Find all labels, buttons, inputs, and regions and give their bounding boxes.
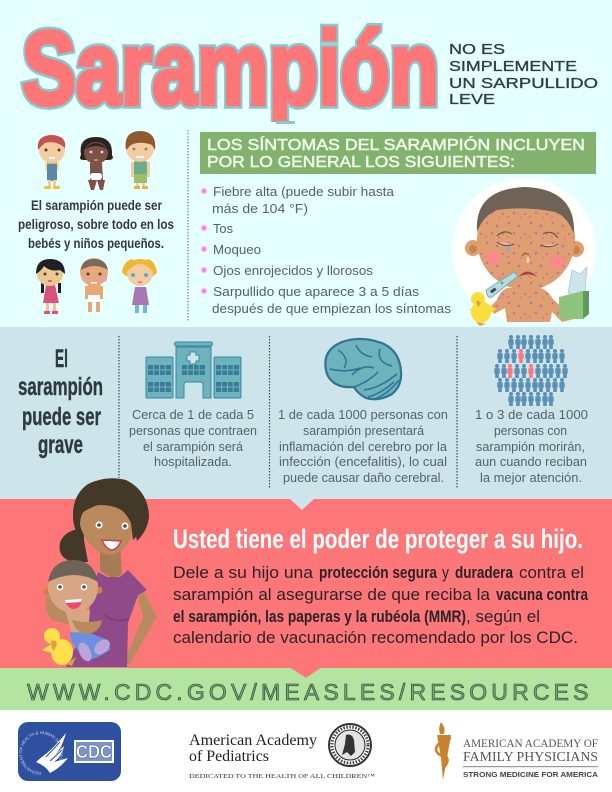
text: vaccine message: , según el — [466, 608, 540, 626]
logo: American Academy of Pediatrics: American Academy — [189, 732, 317, 749]
text: vaccine message — [173, 564, 589, 647]
icon: hospital — [146, 342, 241, 398]
logo: HHS and CDC: DEPARTMENT OF HEALTH & HUMAN SERVICES USA — [19, 731, 63, 775]
url: WWW.CDC.GOV/MEASLES/RESOURCES — [27, 679, 590, 705]
text: encephalitis: puede causar daño cerebral. — [283, 470, 444, 485]
symptoms list: Tos — [213, 221, 233, 236]
symptoms list: Fiebre alta (puede subir hasta — [213, 184, 395, 199]
panel: serious band — [0, 327, 612, 500]
symptoms heading: POR LO GENERAL LOS SIGUIENTES: — [207, 154, 515, 171]
logo: American Academy of Family Physicians: AMERICAN ACADEMY OF — [463, 736, 598, 750]
text: encephalitis: inflamación del cerebro por la — [279, 439, 448, 454]
symptoms list: después de que empiezan los síntomas — [212, 301, 452, 316]
title: Sarampión — [22, 11, 439, 127]
icon: yellow duck — [469, 292, 496, 326]
subtitle — [449, 42, 598, 108]
title: Sarampión — [22, 11, 439, 127]
heading: can be serious: El — [55, 345, 68, 373]
text: encephalitis: 1 de cada 1000 personas con — [278, 407, 448, 422]
icon: duck toy — [42, 628, 76, 666]
symptoms list: Sarpullido que aparece 3 a 5 días — [213, 284, 420, 299]
panel: protect — [0, 499, 612, 668]
heading: can be serious: sarampión — [18, 373, 103, 401]
text: vaccine message: sarampión al asegurarse de que reciba la — [173, 586, 491, 604]
text: deaths: personas con — [494, 423, 567, 438]
text: encephalitis: sarampión presentará — [303, 423, 425, 438]
logo: American Academy of Pediatrics: DEDICATED TO THE HEALTH OF ALL CHILDREN™ — [189, 773, 376, 780]
text: dangerous for children: peligroso, sobre todo en los — [18, 216, 174, 232]
text: vaccine message: contra el — [519, 564, 584, 582]
text: encephalitis — [278, 407, 448, 485]
text: hospitalization: hospitalizada. — [154, 454, 232, 469]
illustration: mother and baby — [42, 478, 157, 667]
text: encephalitis: infección (encefalitis), lo cual — [279, 454, 447, 469]
text: hospitalization: el sarampión será — [143, 439, 244, 454]
subtitle: UN SARPULLIDO — [449, 76, 598, 92]
text: deaths: sarampión morirán, — [476, 439, 585, 454]
icon: thermometer — [486, 272, 518, 297]
symptoms heading: LOS SÍNTOMAS DEL SARAMPIÓN INCLUYEN — [207, 137, 585, 154]
heading: can be serious — [18, 345, 103, 459]
subtitle: SIMPLEMENTE — [449, 59, 577, 75]
text: vaccine message: el sarampión, las paperas y la rubéola (MMR) — [173, 608, 466, 626]
subtitle: NO ES — [449, 42, 505, 58]
heading: can be serious: grave — [38, 431, 83, 459]
logo: American Academy of Family Physicians: STRONG MEDICINE FOR AMERICA — [463, 770, 599, 779]
text: hospitalization — [129, 407, 257, 469]
text: vaccine message: duradera — [455, 564, 514, 582]
symptoms heading — [200, 132, 596, 174]
icon: crowd of people — [494, 335, 568, 406]
logo: HHS and CDC: CDC — [76, 742, 112, 762]
text: dangerous for children: El sarampión puede ser — [31, 197, 162, 213]
icon: tissue box — [559, 267, 589, 319]
logo: HHS and CDC — [18, 722, 121, 781]
text: deaths: 1 o 3 de cada 1000 — [475, 407, 588, 422]
text: vaccine message: Dele a su hijo una — [173, 564, 314, 582]
text: deaths: la mejor atención. — [480, 470, 582, 485]
text: hospitalization: Cerca de 1 de cada 5 — [132, 407, 254, 422]
title — [20, 23, 438, 124]
logo: American Academy of Pediatrics: of Pediatrics — [189, 748, 269, 765]
symptoms list: Moqueo — [213, 242, 261, 257]
text: deaths — [475, 407, 588, 485]
text: dangerous for children — [18, 197, 174, 251]
text: hospitalization: personas que contraen — [129, 423, 257, 438]
text: vaccine message: calendario de vacunación recomendado por los CDC. — [173, 629, 578, 647]
subtitle: LEVE — [449, 92, 495, 108]
logo: American Academy of Family Physicians — [436, 722, 599, 780]
panel: url band — [0, 668, 612, 710]
icon: brain — [325, 339, 401, 399]
notch arrow: red to green — [289, 667, 322, 678]
symptoms list — [201, 184, 452, 316]
icon: children bottom row — [36, 258, 157, 314]
logo: American Academy of Pediatrics — [189, 724, 376, 780]
icon: children top row — [38, 131, 155, 190]
text: dangerous for children: bebés y niños pequeños. — [28, 235, 164, 251]
text: vaccine message: vacuna contra — [496, 586, 589, 604]
notch arrow: blue to red — [290, 499, 314, 510]
text: vaccine message: protección segura — [319, 564, 438, 582]
symptoms list: más de 104 °F) — [212, 201, 308, 216]
logo: American Academy of Family Physicians: FAMILY PHYSICIANS — [463, 750, 598, 765]
icon: sick child — [452, 178, 596, 326]
text: deaths: aun cuando reciban — [475, 454, 587, 469]
text: vaccine message: y — [442, 564, 450, 582]
heading: can be serious: puede ser — [22, 403, 101, 431]
symptoms list: Ojos enrojecidos y llorosos — [213, 263, 374, 278]
